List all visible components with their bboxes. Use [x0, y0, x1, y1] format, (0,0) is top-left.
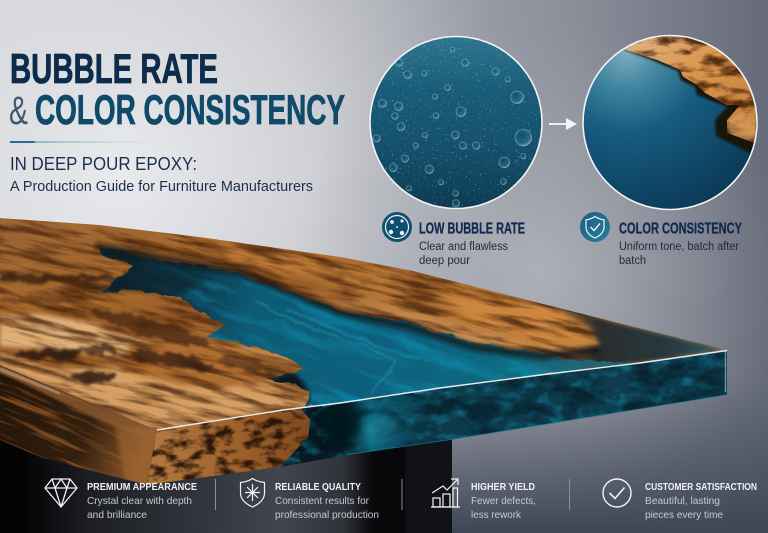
feature description: Uniform tone, batch after — [619, 241, 739, 253]
icon: bubbles badge — [382, 212, 412, 242]
icon: check circle — [603, 479, 631, 507]
benefit text: Beautiful, lasting — [645, 495, 720, 507]
feature description — [419, 241, 508, 267]
feature description: batch — [619, 255, 646, 267]
benefit text — [645, 482, 757, 521]
title ampersand: & — [9, 89, 28, 133]
benefit text — [87, 482, 197, 521]
benefit text: Fewer defects, — [471, 495, 536, 507]
feature description — [619, 241, 739, 267]
subtitle: IN DEEP POUR EPOXY: — [10, 154, 197, 174]
icon: diamond — [45, 479, 77, 507]
feature: low bubble rate — [382, 212, 525, 267]
divider — [215, 479, 216, 510]
resin river — [100, 247, 640, 410]
icon: quality shield — [240, 478, 264, 507]
icon: growth chart — [431, 479, 460, 507]
benefit text: pieces every time — [645, 509, 723, 521]
table resin side — [280, 351, 727, 467]
feature: color consistency — [580, 212, 742, 267]
table top wood surface — [0, 218, 727, 430]
dark grain blots — [0, 265, 380, 383]
benefit text: Consistent results for — [275, 495, 369, 507]
divider — [569, 479, 570, 510]
benefit: premium appearance — [45, 479, 197, 521]
title line 1: BUBBLE RATE — [10, 45, 218, 92]
feature description: deep pour — [419, 255, 470, 267]
title — [9, 45, 345, 133]
benefit text: professional production — [275, 509, 379, 521]
benefit text: PREMIUM APPEARANCE — [87, 482, 197, 493]
river table — [0, 218, 727, 485]
arrow — [549, 118, 577, 130]
benefit text: HIGHER YIELD — [471, 482, 535, 493]
icon: shield badge — [580, 212, 610, 242]
benefit text: RELIABLE QUALITY — [275, 482, 361, 493]
benefit text — [275, 482, 379, 521]
table wood front end — [147, 408, 310, 485]
accent rule — [10, 141, 160, 143]
feature heading: LOW BUBBLE RATE — [419, 220, 525, 238]
benefit text — [471, 482, 536, 521]
circle photo: uniform colour — [583, 30, 760, 210]
subtitle: A Production Guide for Furniture Manufacturers — [10, 179, 313, 195]
table front highlight edge — [157, 350, 727, 430]
subtitle — [10, 154, 313, 195]
benefit: customer satisfaction — [603, 479, 757, 521]
circle photo: bubbles — [370, 36, 542, 208]
divider — [402, 479, 403, 510]
table wood left face — [0, 365, 157, 485]
benefit text: Crystal clear with depth — [87, 495, 192, 507]
feature description: Clear and flawless — [419, 241, 508, 253]
benefit text: and brilliance — [87, 509, 147, 521]
benefit: reliable quality — [240, 478, 379, 521]
benefit text: less rework — [471, 509, 522, 521]
table legs — [0, 430, 452, 533]
resin river shadow bank — [95, 246, 600, 356]
benefit: higher yield — [431, 479, 536, 521]
title line 2: COLOR CONSISTENCY — [35, 86, 345, 133]
